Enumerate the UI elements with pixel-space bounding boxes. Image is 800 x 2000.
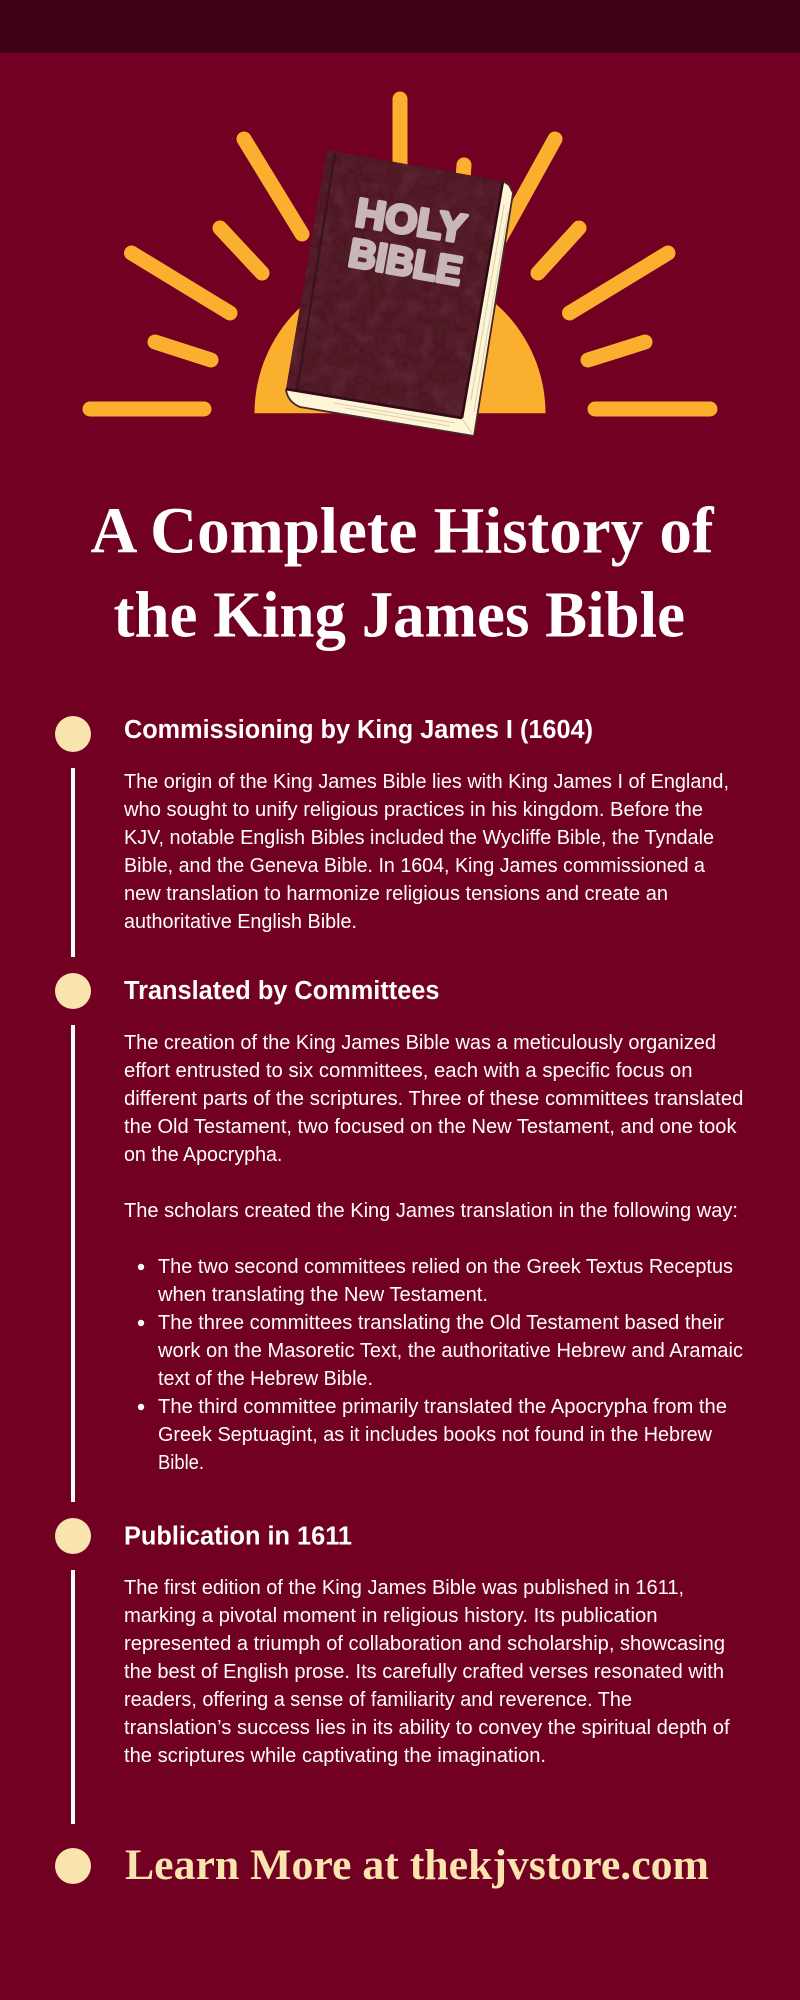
body text: The origin of the King James Bible lies with King James I of England, — [124, 771, 729, 793]
illustration: bible with sunrise — [90, 99, 710, 436]
body text: effort entrusted to six committees, each with a specific focus on — [124, 1060, 692, 1082]
book cover — [286, 150, 503, 418]
body text: new translation to harmonize religious tensions and create an — [124, 883, 668, 905]
cover title: BIBLE — [345, 231, 465, 294]
page edge lines — [334, 205, 508, 433]
call to action — [55, 1842, 709, 1889]
bullet list: when translating the New Testament. — [157, 1284, 488, 1306]
website text: Learn More at thekjvstore.com — [125, 1842, 709, 1889]
section: commissioning by King James I — [55, 716, 729, 957]
bullet list: work on the Masoretic Text, the authoritative Hebrew and Aramaic — [157, 1340, 743, 1362]
body text: Bible, and the Geneva Bible. In 1604, King James commissioned a — [124, 855, 706, 877]
body text — [124, 1577, 730, 1767]
timeline line — [71, 1570, 75, 1824]
bullet list: The two second committees relied on the Greek Textus Receptus — [158, 1256, 733, 1278]
timeline marker — [55, 973, 91, 1009]
body text — [123, 771, 729, 933]
icon: holy bible book — [286, 150, 513, 436]
body text: different parts of the scriptures. Three of these committees translated — [124, 1088, 743, 1110]
body text: marking a pivotal moment in religious history. Its publication — [124, 1605, 658, 1627]
cover title: HOLY — [353, 191, 469, 252]
bullet list — [138, 1256, 743, 1474]
timeline line — [71, 768, 75, 957]
heading: Publication in 1611 — [124, 1522, 352, 1550]
body text: authoritative English Bible. — [124, 911, 357, 933]
bullet list: The third committee primarily translated the Apocrypha from the — [158, 1396, 727, 1418]
bullet list: The three committees translating the Old Testament based their — [158, 1312, 724, 1334]
cover edges and spine — [286, 153, 503, 418]
title: A Complete History of — [90, 494, 714, 568]
timeline marker — [55, 716, 91, 752]
body text: on the Apocrypha. — [124, 1144, 282, 1166]
section: translated by committees — [55, 973, 743, 1502]
top band — [0, 0, 800, 53]
icon: sun rays — [90, 99, 710, 409]
bullet list: Bible. — [158, 1452, 204, 1474]
cover title — [345, 191, 469, 294]
body text: the best of English prose. Its carefully crafted verses resonated with — [124, 1661, 724, 1683]
timeline marker — [55, 1518, 91, 1554]
body text — [124, 1032, 743, 1222]
section: publication in 1611 — [55, 1518, 730, 1824]
heading: Translated by Committees — [124, 977, 440, 1005]
icon: half sun — [254, 268, 546, 413]
body text: The first edition of the King James Bible was published in 1611, — [124, 1577, 684, 1599]
heading: Commissioning by King James I (1604) — [124, 716, 593, 744]
bullet list: text of the Hebrew Bible. — [158, 1368, 373, 1390]
timeline line — [71, 1025, 75, 1502]
body text: The scholars created the King James translation in the following way: — [124, 1200, 738, 1222]
book pages — [286, 181, 513, 436]
timeline marker — [55, 1848, 91, 1884]
body text: readers, offering a sense of familiarity and reverence. The — [124, 1689, 632, 1711]
body text: the Old Testament, two focused on the New Testament, and one took — [124, 1116, 737, 1138]
bullet list: Greek Septuagint, as it includes books not found in the Hebrew — [158, 1424, 713, 1446]
title: the King James Bible — [114, 578, 685, 652]
body text: KJV, notable English Bibles included the Wycliffe Bible, the Tyndale — [124, 827, 714, 849]
body text: translation’s success lies in its ability to convey the spiritual depth of — [124, 1717, 730, 1739]
body text: represented a triumph of collaboration and scholarship, showcasing — [124, 1633, 725, 1655]
body text: The creation of the King James Bible was a meticulously organized — [124, 1032, 716, 1054]
body text: the scriptures while captivating the imagination. — [124, 1745, 546, 1767]
body text: who sought to unify religious practices in his kingdom. Before the — [123, 799, 703, 821]
title — [90, 494, 714, 652]
